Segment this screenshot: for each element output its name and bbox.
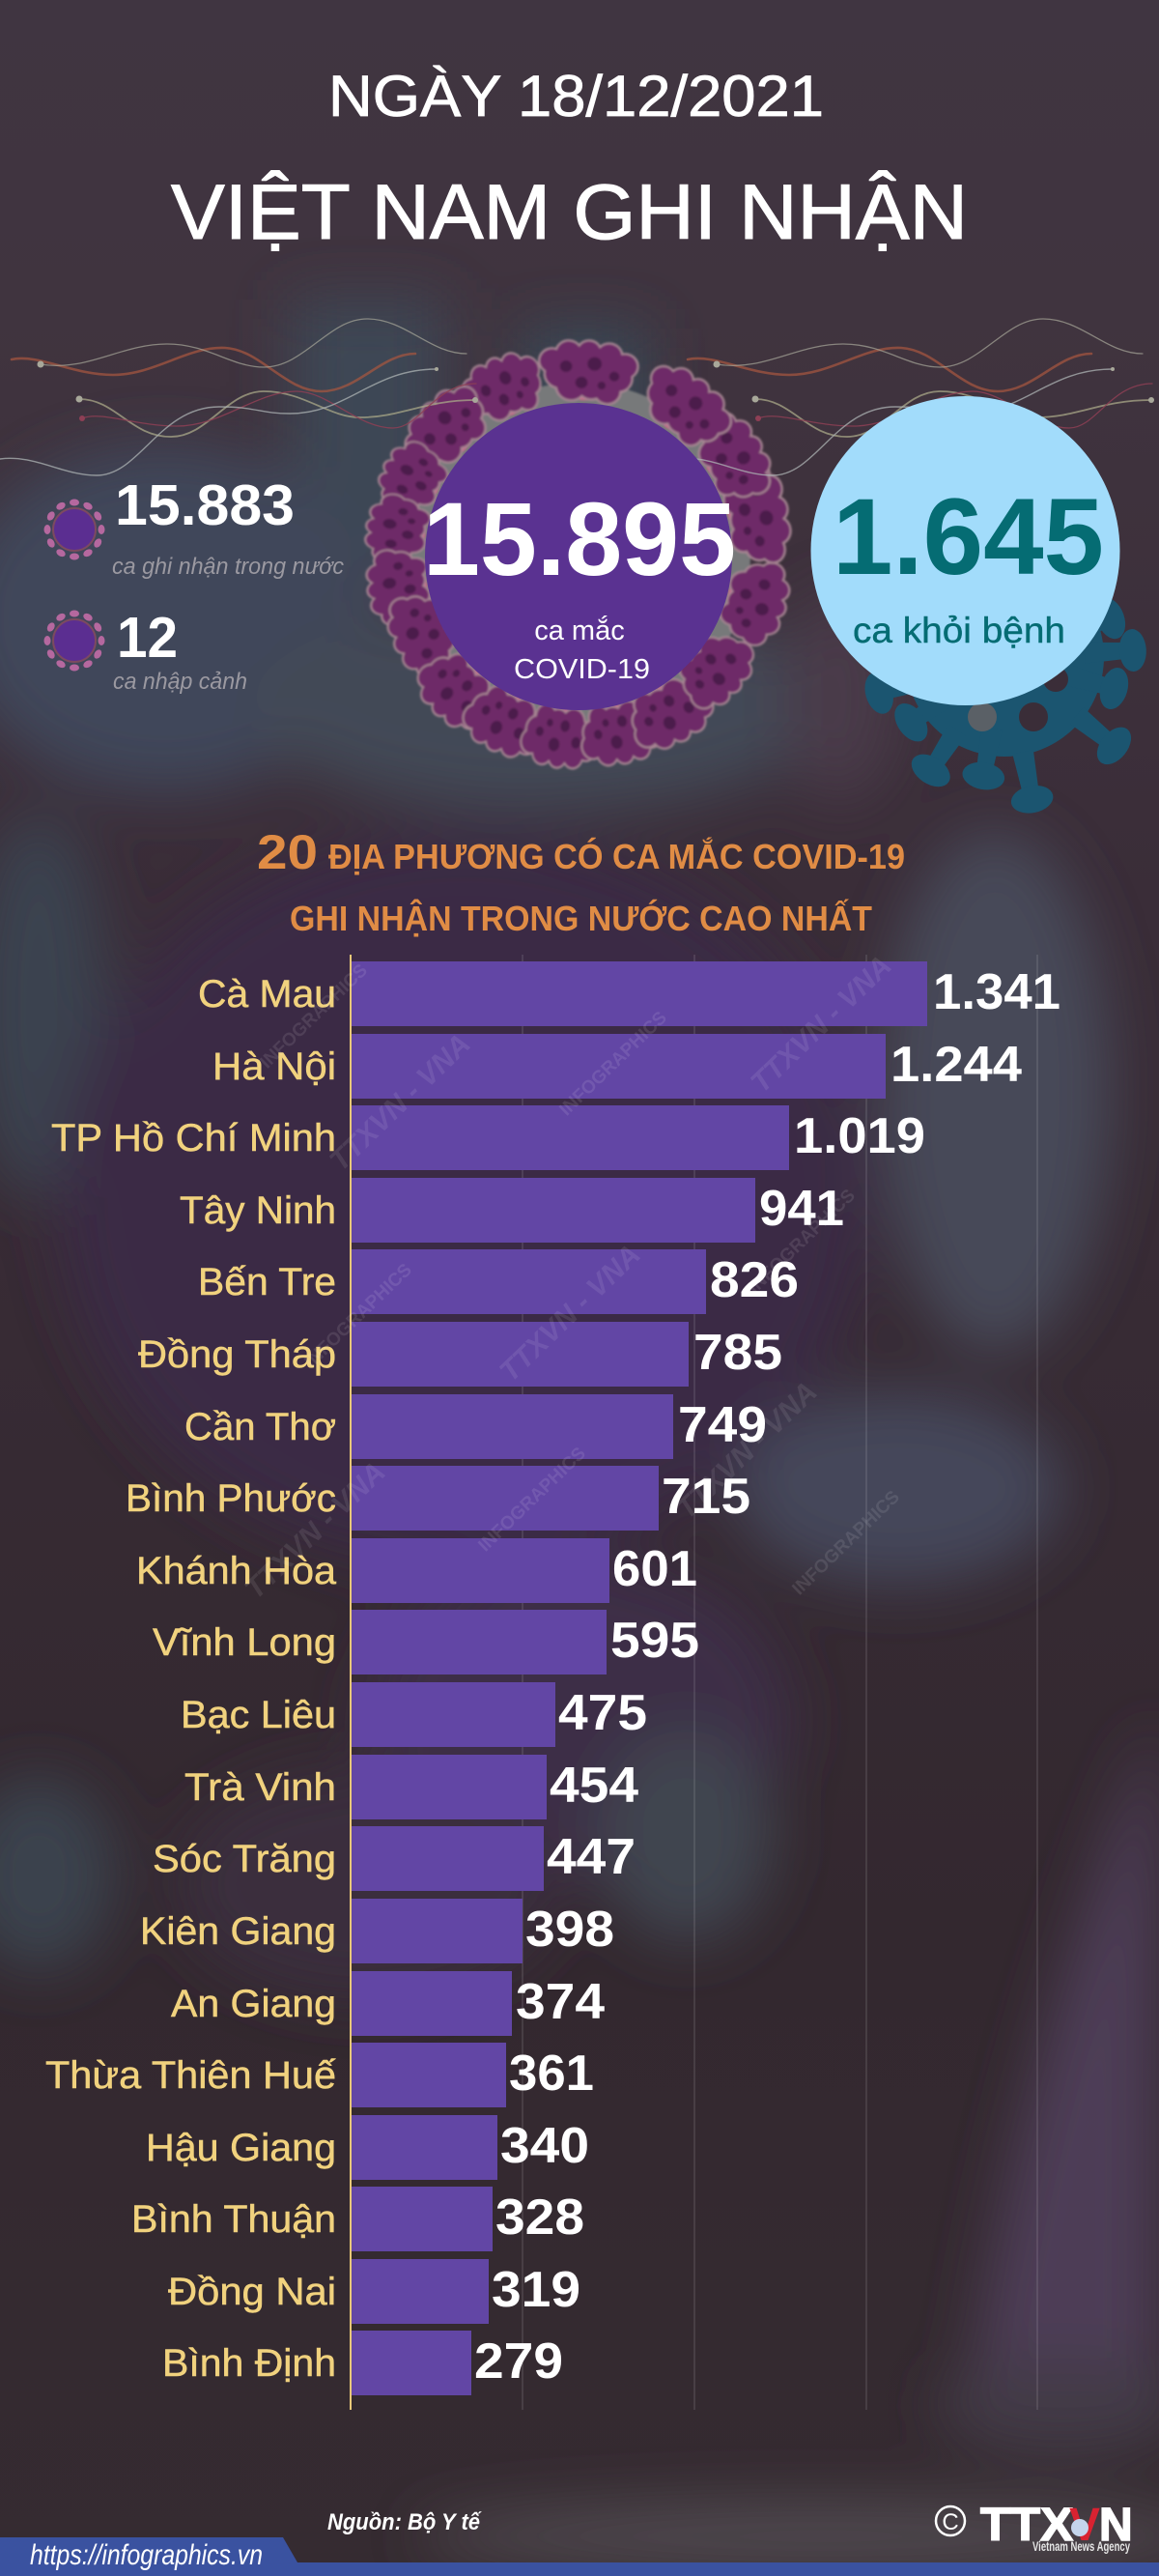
watermarks: INFOGRAPHICS	[300, 1260, 416, 1372]
watermarks: TTXVN - VNA	[324, 1028, 477, 1177]
row: An Giang	[171, 1971, 605, 2036]
source note: Nguồn: Bộ Y tế	[327, 2509, 482, 2535]
row: Sóc Trăng: 447	[547, 1829, 636, 1885]
heading: chart title: GHI NHẬN TRONG NƯỚC CAO NHẤT	[290, 898, 872, 938]
panel: total cases circle: COVID-19	[514, 654, 650, 685]
row: Vĩnh Long	[153, 1610, 699, 1674]
row: Cà Mau: Cà Mau	[198, 973, 336, 1016]
watermarks: INFOGRAPHICS	[555, 1008, 671, 1120]
stat: domestic cases	[44, 473, 344, 580]
watermarks: TTXVN - VNA	[745, 950, 898, 1099]
row: Thừa Thiên Huế: Thừa Thiên Huế	[45, 2054, 336, 2097]
row: Thừa Thiên Huế	[45, 2043, 594, 2107]
stat: domestic cases: ca ghi nhận trong nước	[112, 554, 344, 580]
row: Đồng Nai: Đồng Nai	[168, 2271, 336, 2313]
logo: TTXVN: V	[1069, 2500, 1100, 2551]
row: Bình Định	[162, 2331, 563, 2395]
icon: teal virus behind recovered circle	[861, 558, 1147, 816]
row: Đồng Tháp	[138, 1322, 782, 1387]
watermarks: INFOGRAPHICS	[788, 1487, 904, 1599]
footer url: https://infographics.vn	[30, 2539, 263, 2571]
row: Cà Mau: 1.341	[933, 964, 1060, 1020]
bar chart: 20 localities	[45, 955, 1060, 2410]
row: Hậu Giang	[146, 2115, 589, 2180]
row: Bạc Liêu: Bạc Liêu	[181, 1694, 336, 1736]
total cases caption: ca mắc	[534, 615, 625, 646]
row: TP Hồ Chí Minh	[51, 1105, 925, 1170]
illustration: main coronavirus	[362, 339, 798, 772]
logo: TTXVN: C	[942, 2509, 959, 2535]
row: Bình Thuận: Bình Thuận	[131, 2198, 336, 2241]
logo: TTXVN	[936, 2500, 1133, 2554]
row: Tây Ninh: 941	[759, 1181, 844, 1237]
row: Đồng Tháp: Đồng Tháp	[138, 1333, 336, 1376]
row: Kiên Giang	[140, 1899, 614, 1963]
title: date: NGÀY 18/12/2021	[328, 64, 824, 129]
row: Hà Nội	[212, 1034, 1022, 1099]
decorative waves: right	[676, 319, 1154, 475]
row: Bến Tre: 826	[710, 1252, 799, 1308]
watermarks: INFOGRAPHICS	[256, 960, 372, 1073]
stat: imported cases	[44, 606, 247, 695]
row: Bạc Liêu	[181, 1682, 647, 1747]
row: Đồng Tháp: 785	[693, 1325, 782, 1381]
row: Tây Ninh	[180, 1178, 844, 1243]
watermarks: TTXVN - VNA	[239, 1456, 392, 1605]
footer band	[0, 2537, 1159, 2576]
row: Kiên Giang: Kiên Giang	[140, 1910, 336, 1953]
decorative waves: left	[0, 319, 478, 475]
row: Bình Phước: 715	[662, 1469, 750, 1525]
row: Khánh Hòa: 601	[612, 1541, 697, 1597]
icon: small virus	[44, 499, 104, 560]
row: Bình Thuận	[131, 2187, 584, 2251]
heading: chart title: ĐỊA PHƯƠNG CÓ CA MẮC COVID-19	[328, 836, 905, 876]
row: Tây Ninh: Tây Ninh	[180, 1189, 336, 1232]
watermarks: TTXVN - VNA	[670, 1376, 824, 1525]
row: TP Hồ Chí Minh: 1.019	[794, 1108, 925, 1164]
icon: small virus	[44, 611, 104, 671]
row: Vĩnh Long: 595	[610, 1613, 699, 1669]
row: Khánh Hòa: Khánh Hòa	[136, 1550, 337, 1592]
watermarks: INFOGRAPHICS	[474, 1444, 590, 1556]
row: Trà Vinh: Trà Vinh	[184, 1766, 336, 1809]
row: Bình Thuận: 328	[495, 2190, 584, 2246]
row: Hà Nội: Hà Nội	[212, 1045, 336, 1088]
recovered caption: ca khỏi bệnh	[853, 611, 1065, 650]
row: Bình Định: 279	[474, 2333, 563, 2390]
row: Bình Định: Bình Định	[162, 2342, 336, 2385]
watermarks: INFOGRAPHICS	[744, 1186, 860, 1298]
row: Hà Nội: 1.244	[890, 1037, 1022, 1093]
row: Đồng Nai	[168, 2259, 580, 2324]
row: Hậu Giang: 340	[500, 2118, 589, 2174]
row: Cần Thơ: 749	[678, 1397, 767, 1453]
row: Trà Vinh	[184, 1755, 638, 1819]
watermarks: TTXVN - VNA	[494, 1239, 647, 1388]
row: Vĩnh Long: Vĩnh Long	[153, 1621, 336, 1664]
logo: TTXVN: TTX	[980, 2500, 1073, 2551]
row: Bình Phước: Bình Phước	[126, 1477, 336, 1520]
panel: recovered circle	[811, 396, 1120, 705]
title: Việt Nam ghi nhận: VIỆT NAM GHI NHẬN	[171, 169, 968, 256]
row: Sóc Trăng	[153, 1826, 636, 1891]
row: Kiên Giang: 398	[525, 1902, 614, 1958]
row: Bến Tre: Bến Tre	[198, 1261, 336, 1303]
row: Bến Tre	[198, 1249, 799, 1314]
total cases number: 15.895	[423, 480, 736, 597]
row: Thừa Thiên Huế: 361	[509, 2046, 594, 2102]
stat: imported cases: ca nhập cảnh	[113, 669, 247, 695]
row: Bình Phước	[126, 1466, 750, 1531]
stat: imported cases: 12	[117, 606, 178, 670]
row: Hậu Giang: Hậu Giang	[146, 2127, 336, 2169]
row: Cần Thơ	[184, 1394, 767, 1459]
heading: chart title	[257, 825, 905, 938]
recovered number: 1.645	[833, 476, 1104, 597]
row: Sóc Trăng: Sóc Trăng	[153, 1838, 336, 1880]
row: An Giang: An Giang	[171, 1983, 336, 2025]
row: Cần Thơ: Cần Thơ	[184, 1406, 336, 1448]
heading: chart title: 20	[257, 825, 318, 879]
row: An Giang: 374	[516, 1974, 605, 2030]
row: Đồng Nai: 319	[492, 2262, 580, 2318]
watermarks	[239, 950, 904, 1605]
row: Cà Mau	[198, 961, 1060, 1026]
row: Trà Vinh: 454	[550, 1758, 638, 1814]
row: Khánh Hòa	[136, 1538, 697, 1603]
row: TP Hồ Chí Minh: TP Hồ Chí Minh	[51, 1117, 336, 1159]
panel: total cases circle	[423, 403, 736, 710]
row: Bạc Liêu: 475	[558, 1685, 647, 1741]
stat: domestic cases: 15.883	[115, 473, 295, 537]
logo: TTXVN: N	[1099, 2500, 1133, 2551]
